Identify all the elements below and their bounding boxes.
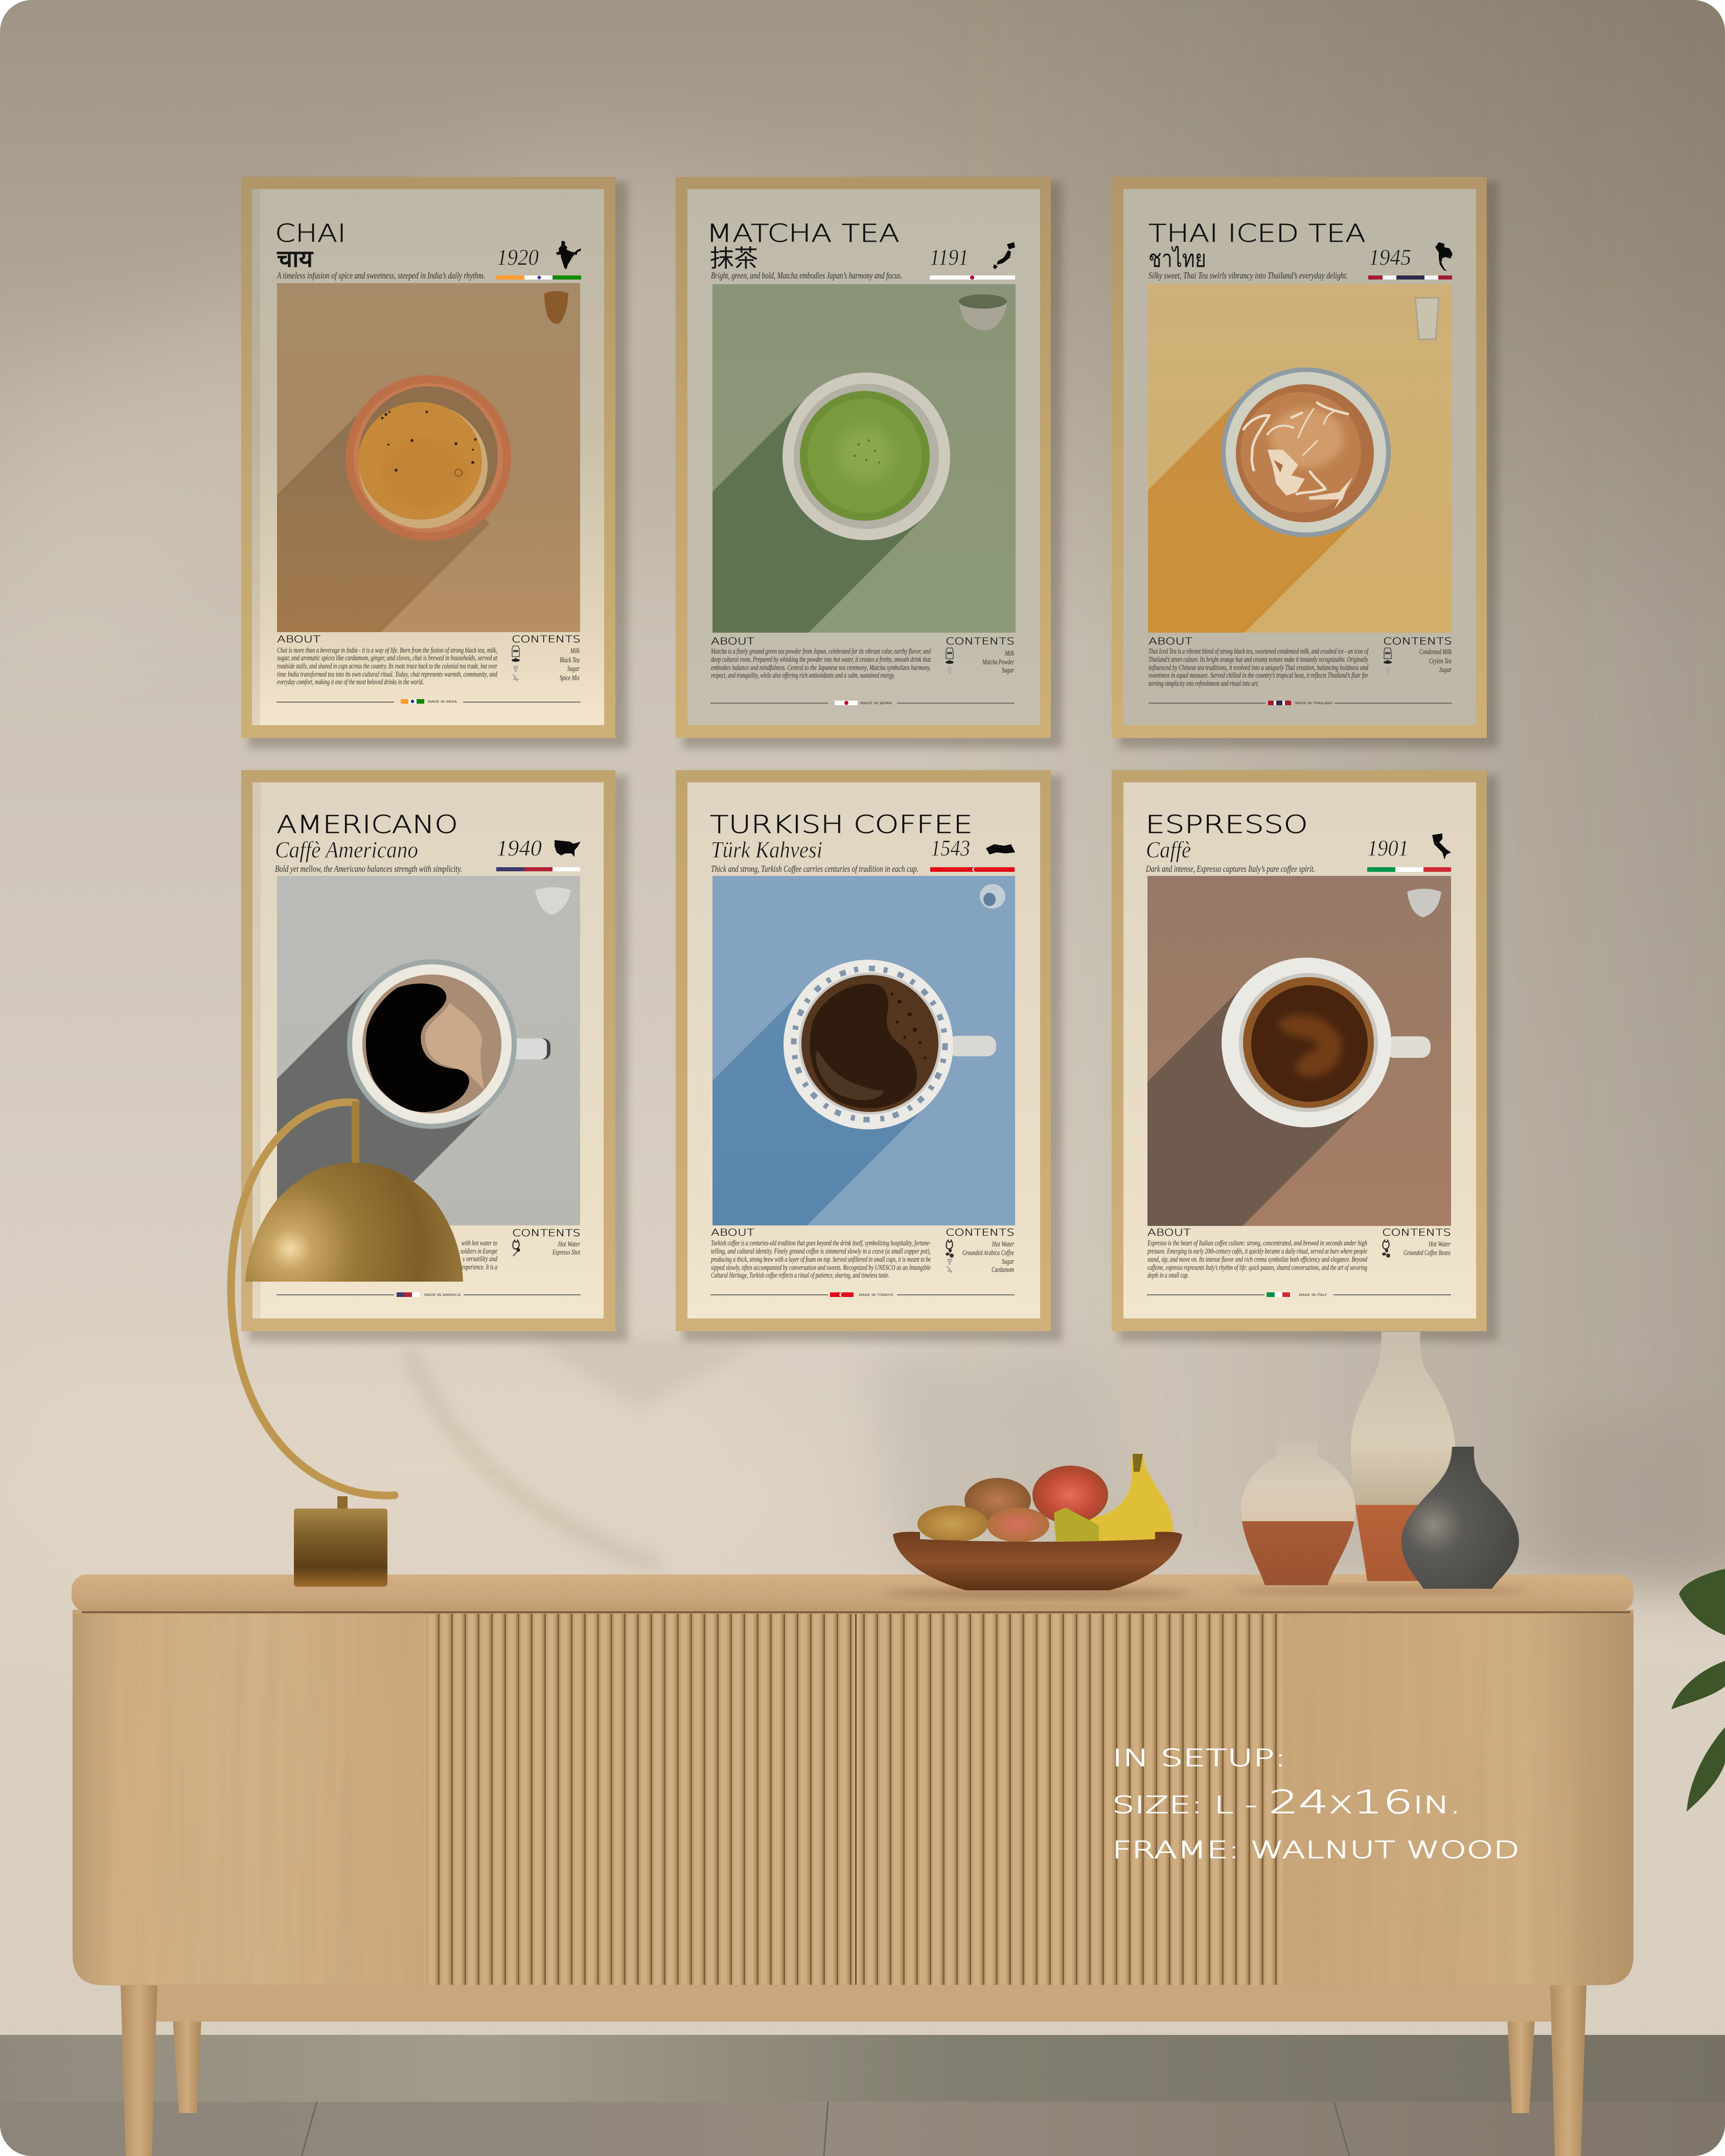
about text: time India transformed tea into its own cultural ritual. Today, chai represents warmth, community, and (277, 670, 497, 679)
contents list: Hot Water (992, 1240, 1014, 1248)
about text: soldiers in Europe (461, 1247, 497, 1256)
icon: thailand map (1435, 242, 1453, 271)
about text: sugar, and aromatic spices like cardamom, ginger, and cloves, chai is brewed in households, served at (277, 654, 498, 662)
title: AMERICANO (277, 810, 458, 839)
poster: thai iced tea (1112, 177, 1498, 748)
contents list: Espresso Shot (552, 1248, 581, 1257)
right door (1283, 1614, 1634, 1985)
contents list (946, 1240, 1014, 1274)
contents heading: CONTENTS (512, 1227, 581, 1239)
setup specification text: FRAME: WALNUT WOOD (1112, 1836, 1520, 1864)
contents list: Sugar (567, 665, 580, 673)
footer: made in turkiye (710, 1292, 1015, 1297)
contents list: Milk (1004, 650, 1014, 658)
year: 1945 (1369, 245, 1411, 270)
plant (1671, 1569, 1725, 1812)
about text: Thailand’s street culture. Its bright orange hue and creamy texture make it instantly recognizable. Originally (1148, 656, 1368, 664)
contents list: Cardamom (992, 1266, 1014, 1274)
icon: clay cup (544, 291, 568, 324)
about text: with hot water to (462, 1239, 497, 1247)
contents list (512, 646, 580, 682)
about heading: ABOUT (277, 634, 321, 645)
lamp stem (352, 1101, 359, 1165)
title: TURKISH COFFEE (710, 810, 973, 839)
cabinet (72, 1574, 1634, 2156)
drink illustration: matcha (712, 284, 1016, 633)
mango (964, 1478, 1031, 1523)
tall vase (1351, 1332, 1455, 1581)
contents heading: CONTENTS (512, 634, 581, 645)
contents list: Sugar (1439, 666, 1452, 674)
about text: telling, and cultural identity. Finely ground coffee is simmered slowly in a cezve (a small copper pot), (711, 1247, 931, 1256)
footer: made in thailand (1148, 701, 1452, 705)
contents heading: CONTENTS (946, 1227, 1015, 1238)
contents list: Milk (570, 647, 580, 655)
contents list: Sugar (1002, 666, 1014, 675)
contents list (1384, 648, 1452, 674)
icon: india map (556, 241, 581, 269)
tagline: Thick and strong, Turkish Coffee carries centuries of tradition in each cup. (711, 864, 918, 874)
about text (1148, 647, 1369, 688)
contents list (513, 1240, 581, 1257)
contents list: Hot Water (558, 1240, 580, 1248)
footer: made in turkiye: MADE IN TÜRKIYE (859, 1292, 893, 1297)
about text: experience. It is a (462, 1263, 497, 1271)
title: THAI ICED TEA (1148, 219, 1366, 248)
contents list: Sugar (1002, 1258, 1014, 1266)
about text: depth in a small cup. (1147, 1271, 1189, 1280)
icon: matcha bowl (959, 294, 1007, 331)
tagline: Bright, green, and bold, Matcha embodies Japan’s harmony and focus. (711, 270, 902, 281)
about text: turning simplicity into refreshment and ritual into art. (1148, 680, 1259, 688)
left door (73, 1614, 427, 1985)
about text: Espresso is the heart of Italian coffee culture: strong, concentrated, and brewed in seconds under high (1147, 1239, 1367, 1247)
native name: Caffè Americano (275, 837, 418, 863)
front legs (121, 1985, 1586, 2156)
about text: sweetness in equal measure. Served chilled in the country’s tropical heat, it reflects Thailand’s flair for (1148, 671, 1368, 680)
icon: patterned cup (980, 884, 1005, 909)
flag bar: thailand (1368, 275, 1452, 280)
back legs (173, 2019, 1535, 2113)
year: 1901 (1367, 836, 1409, 861)
contents heading: CONTENTS (1382, 1227, 1451, 1238)
about text (710, 647, 931, 680)
flag bar: america (496, 867, 580, 871)
native name: Caffè (1146, 837, 1191, 863)
lamp arm (231, 1102, 395, 1495)
footer: made in america: MADE IN AMERICA (424, 1293, 461, 1297)
bowl (893, 1532, 1182, 1590)
footer: made in america (277, 1292, 581, 1297)
red mango (987, 1508, 1049, 1542)
lamp shade (245, 1163, 463, 1282)
about text (277, 646, 498, 686)
vases (1232, 1332, 1528, 1595)
contents heading: CONTENTS (946, 636, 1015, 647)
red fruit (1032, 1466, 1108, 1524)
poster: turkish coffee (676, 770, 1062, 1341)
about text: stand, sip, and move on. Its intense flavor and rich crema symbolize both efficiency and elegance. Beyond (1147, 1256, 1367, 1264)
about heading: ABOUT (711, 1227, 755, 1238)
about text: pressure. Emerging in early 20th-century cafés, it quickly became a daily ritual, served at bars where people (1147, 1247, 1367, 1256)
icon: espresso cup (1407, 889, 1441, 917)
contents list: Black Tea (560, 656, 580, 664)
footer: made in japan: MADE IN JAPAN (860, 701, 892, 705)
orange mango (917, 1505, 988, 1542)
setup specification text: SIZE: L - 24 X 16 IN. (1112, 1783, 1461, 1821)
year: 1191 (930, 245, 969, 270)
fruit bowl (884, 1454, 1191, 1598)
setup specification text: IN SETUP: (1112, 1744, 1286, 1772)
drink illustration: americano (277, 876, 580, 1225)
cabinet body (73, 1610, 1634, 1985)
footer: made in italy (1147, 1292, 1451, 1297)
footer: made in india (277, 699, 581, 704)
footer: made in thailand: MADE IN THAILAND (1295, 701, 1332, 705)
contents list (1382, 1240, 1451, 1258)
flag bar: india (496, 275, 581, 280)
icon: japan map (993, 242, 1015, 269)
about text: deep cultural roots. Prepared by whisking the powder into hot water, it creates a frothy, smooth drink that (711, 656, 931, 664)
flag bar: japan (930, 275, 1015, 280)
footer: made in japan (710, 701, 1015, 705)
poster: americano (241, 770, 628, 1341)
about text: everyday comfort, making it one of the most beloved drinks in the world. (277, 678, 424, 686)
about text: influenced by Chinese tea traditions, it evolved into a uniquely Thai creation, balancing boldness and (1148, 664, 1368, 672)
about text (1147, 1239, 1367, 1280)
drink illustration: chai (277, 283, 580, 632)
short vase (1241, 1442, 1355, 1585)
about text (461, 1239, 497, 1271)
contents list: Condensed Milk (1419, 648, 1452, 656)
about heading: ABOUT (1147, 1227, 1191, 1238)
lamp base (294, 1496, 387, 1587)
native name: चाय (277, 245, 314, 272)
drink illustration: thai tea (1148, 284, 1452, 633)
contents list (946, 648, 1014, 675)
drink illustration: turkish coffee (712, 876, 1015, 1225)
about text (710, 1239, 931, 1280)
lower rail (156, 1985, 1551, 2022)
icon: iced tea glass (1415, 298, 1439, 339)
drink illustration: espresso (1147, 876, 1451, 1226)
native name: Türk Kahvesi (711, 837, 822, 863)
about text: caffeine, espresso represents Italy’s rhythm of life: quick pauses, shared conversations, and the art of savoring (1147, 1264, 1367, 1272)
about text: Turkish coffee is a centuries-old tradition that goes beyond the drink itself, symbolizing hospitality, fortune- (711, 1239, 931, 1247)
contents list: Spice Mix (560, 674, 580, 682)
title: CHAI (275, 219, 346, 248)
about text: Matcha is a finely ground green tea powder from Japan, celebrated for its vibrant color, earthy flavor, and (710, 647, 931, 656)
about text: sipped slowly, often accompanied by conversation and sweets. Recognized by UNESCO as an Intangible (711, 1264, 931, 1272)
contents list: Grounded Arabica Coffee (962, 1249, 1014, 1257)
tagline: Silky sweet, Thai Tea swirls vibrancy into Thailand’s everyday delight. (1148, 270, 1348, 281)
about heading: ABOUT (711, 636, 755, 647)
about text: Chai is more than a beverage in India - it is a way of life. Born from the fusion of strong black tea, milk, (277, 646, 497, 655)
flag bar: turkey (930, 867, 1015, 872)
contents list: Hot Water (1428, 1240, 1451, 1248)
baseboard and floor (0, 2035, 1725, 2156)
poster: matcha tea (676, 177, 1062, 748)
about text: Thai Iced Tea is a vibrant blend of strong black tea, sweetened condensed milk, and crushed ice - an icon of (1148, 647, 1369, 656)
native name: ชาไทย (1148, 245, 1206, 272)
year: 1940 (496, 836, 542, 861)
icon: small cup (535, 887, 571, 915)
about text: s versatility and (463, 1255, 497, 1263)
tagline: Dark and intense, Espresso captures Italy’s pure coffee spirit. (1145, 864, 1315, 874)
cabinet top (72, 1574, 1634, 1612)
dark vase (1401, 1447, 1519, 1589)
icon: turkey map (986, 844, 1015, 854)
poster: espresso (1112, 770, 1498, 1341)
contents heading: CONTENTS (1383, 636, 1452, 647)
lamp (231, 1101, 463, 1587)
about text: roadside stalls, and shared in cups across the country. Its roots trace back to the colonial tea trade, but over (277, 662, 497, 670)
tagline: Bold yet mellow, the Americano balances strength with simplicity. (275, 864, 462, 874)
about text: embodies balance and mindfulness. Central to the Japanese tea ceremony, Matcha symbolizes harmony, (711, 664, 931, 672)
about heading: ABOUT (1148, 636, 1193, 647)
banana (1054, 1454, 1173, 1542)
about text: respect, and tranquility, while also offering rich antioxidants and a calm, sustained energy. (711, 671, 895, 680)
contents list: Ceylon Tea (1429, 657, 1452, 665)
setup specification text (1112, 1744, 1520, 1864)
about text: producing a thick, strong brew with a layer of foam on top. Served unfiltered in small cups, it is meant to be (710, 1256, 931, 1264)
year: 1543 (931, 836, 970, 861)
contents list: Grounded Coffee Beans (1404, 1249, 1451, 1257)
banana tips (1054, 1508, 1099, 1541)
icon: italy map (1432, 833, 1451, 860)
native name: 抹茶 (710, 245, 758, 272)
year: 1920 (497, 245, 539, 270)
contents list: Matcha Powder (982, 658, 1014, 666)
about text: Cultural Heritage, Turkish coffee reflects a ritual of patience, sharing, and timeless taste. (711, 1271, 889, 1280)
icon: usa map (555, 840, 581, 857)
tagline: A timeless infusion of spice and sweetness, steeped in India’s daily rhythm. (277, 270, 485, 281)
title: MATCHA TEA (706, 219, 900, 248)
poster: chai (241, 177, 628, 748)
title: ESPRESSO (1145, 810, 1308, 839)
footer: made in india: MADE IN INDIA (428, 700, 457, 704)
flag bar: italy (1367, 867, 1451, 872)
fluted doors (427, 1614, 1283, 1985)
footer: made in italy: MADE IN ITALY (1299, 1293, 1327, 1297)
